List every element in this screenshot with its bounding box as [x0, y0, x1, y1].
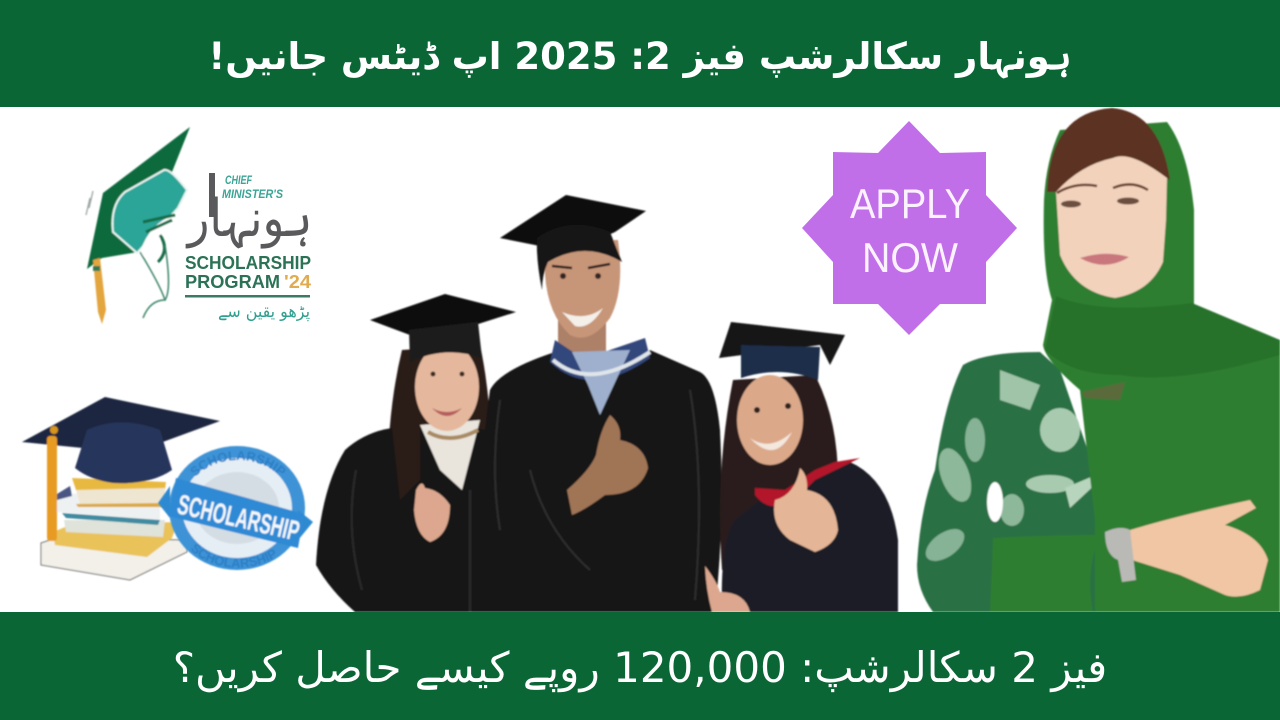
title banner: ہونہار سکالرشپ فیز 2: 2025 اپ ڈیٹس جانیں!	[208, 35, 1072, 78]
logo wordmark: CHIEF	[225, 173, 253, 187]
stamp: Scholarship: SCHOLARSHIP	[190, 451, 286, 476]
logo wordmark	[185, 173, 312, 322]
stamp: Scholarship: SCHOLARSHIP	[175, 489, 302, 547]
sleeve	[990, 535, 1100, 612]
cap board	[22, 397, 220, 448]
portrait: woman in green scarf	[917, 108, 1280, 612]
logo wordmark: ہونہار	[185, 189, 312, 249]
patterned green dress	[917, 352, 1105, 612]
icon: graduation cap, book and hand	[86, 127, 190, 324]
footer banner: فیز 2 سکالرشپ: 120,000 روپے کیسے حاصل کریں؟	[173, 643, 1107, 692]
illustration panel	[22, 107, 1280, 612]
graduate: left woman	[316, 294, 520, 612]
hair	[1047, 108, 1170, 192]
tassel	[47, 436, 57, 541]
badge text: APPLY	[850, 180, 970, 227]
logo wordmark: MINISTER'S	[222, 187, 283, 201]
graduate: centre man	[482, 195, 722, 612]
icon: graduation cap on stack of books	[22, 397, 220, 580]
logo wordmark: '24	[284, 272, 311, 292]
badge text: NOW	[862, 234, 958, 281]
wristwatch	[1105, 528, 1136, 582]
cap body	[75, 422, 172, 483]
logo wordmark: PROGRAM	[185, 272, 280, 292]
face	[1056, 156, 1167, 298]
apply now badge	[802, 121, 1017, 335]
plain green scarf and robe	[1043, 122, 1280, 612]
hands and wrist	[1130, 500, 1268, 597]
book stack	[41, 478, 187, 580]
graduates photo	[316, 195, 898, 612]
logo wordmark: پڑھو یقین سے	[218, 302, 310, 322]
logo wordmark: SCHOLARSHIP	[185, 253, 311, 273]
stamp: Scholarship: SCHOLARSHIP	[192, 544, 275, 568]
collar brooch	[1082, 382, 1125, 400]
logo: Chief Minister's Honhaar Scholarship Program	[86, 127, 312, 324]
graduate: right woman	[705, 322, 898, 612]
stamp: Scholarship	[157, 444, 314, 572]
title banner	[0, 0, 1280, 107]
icon: pencil tassel	[93, 258, 106, 324]
footer banner	[0, 612, 1280, 720]
badge text	[850, 180, 970, 281]
